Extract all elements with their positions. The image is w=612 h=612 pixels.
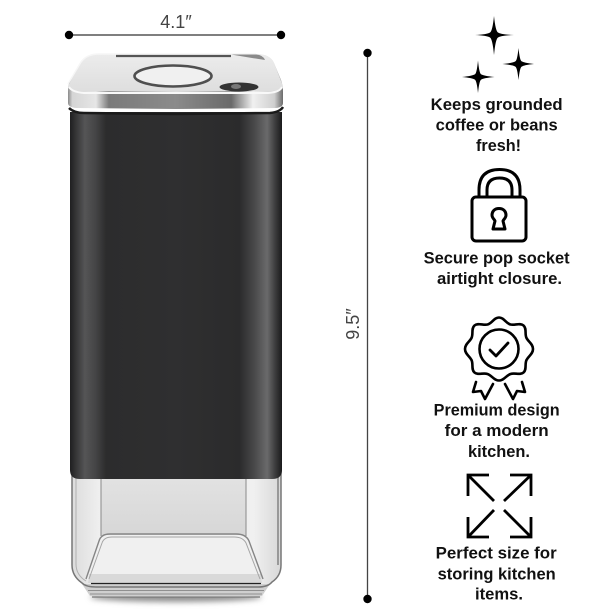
- text: fresh: fresh!: [476, 136, 521, 155]
- text: premium: Premium design: [434, 400, 560, 420]
- canister product: [68, 54, 283, 602]
- text: fresh: Keeps grounded: [431, 95, 563, 114]
- valve: [220, 82, 258, 92]
- text: premium: kitchen.: [468, 442, 530, 461]
- text: closure: Secure pop socket: [424, 248, 570, 268]
- icon: sparkles: [462, 16, 534, 93]
- text: closure: airtight closure.: [437, 269, 562, 288]
- height dimension: 9.5″: [343, 308, 363, 340]
- black sleeve: [70, 112, 282, 479]
- glass base: [72, 470, 281, 598]
- lid ring: [134, 66, 212, 86]
- width dimension: 4.1″: [160, 12, 192, 32]
- text: size: items.: [475, 584, 523, 604]
- height dimension: [343, 49, 372, 603]
- icon: expand arrows: [468, 475, 531, 537]
- text: size: storing kitchen: [438, 564, 556, 584]
- metal lid: [68, 54, 283, 114]
- floor shadow: [90, 592, 262, 602]
- icon: padlock: [472, 170, 526, 241]
- text: fresh: coffee or beans: [436, 116, 558, 134]
- text: premium: for a modern: [445, 421, 549, 440]
- text: size: Perfect size for: [436, 544, 557, 562]
- icon: award badge: [465, 318, 533, 399]
- width dimension: [65, 12, 285, 39]
